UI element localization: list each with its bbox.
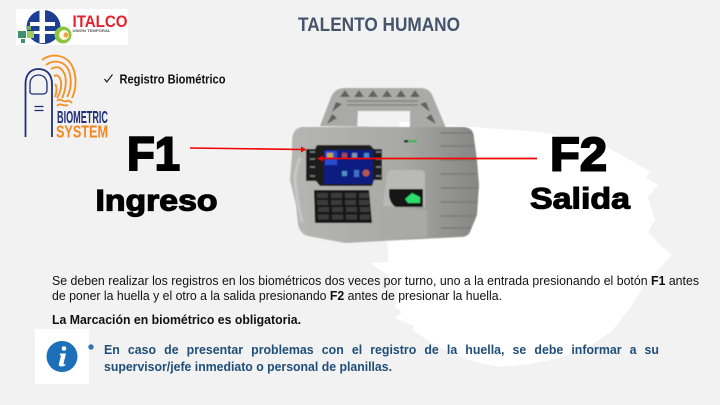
biometric device illustration: [290, 88, 479, 243]
icon: biometric system: BIOMETRIC: [57, 107, 108, 127]
status LED: [404, 140, 408, 142]
arrow: F1 to device button: [190, 146, 306, 152]
title: TALENTO HUMANO: [298, 14, 460, 36]
keypad: [314, 190, 372, 223]
screen: [324, 150, 373, 184]
screen icons: [325, 151, 370, 177]
icon: biometric system: SYSTEM: [56, 122, 108, 142]
checklist item: Registro Biométrico: Registro Biométrico: [120, 72, 226, 86]
body text: registration instructions: Se deben realizar los registros en los biométricos dos veces por turno, uno a la entrada presionando el botón F1 antes: [52, 273, 702, 288]
lower panel: [382, 210, 427, 237]
equals mark: [34, 106, 44, 110]
logo: ITALCO: ITALCO: [72, 13, 128, 31]
callout: fingerprint problems: supervisor/jefe inmediato o personal de planillas.: [104, 359, 392, 374]
keypad keys: [317, 193, 370, 220]
side buttons: [310, 152, 381, 176]
fingerprint arcs: [42, 56, 76, 106]
label: F1: F1: [127, 127, 180, 180]
icon: biometric system: [26, 56, 108, 141]
handle band: [347, 101, 418, 105]
device body: [290, 127, 479, 243]
logo: ITALCO: [16, 9, 128, 45]
label: Salida: Salida: [530, 182, 630, 216]
arrow: F2 to device button: [317, 156, 537, 162]
finger outline: [26, 69, 52, 137]
label: F2: F2: [550, 128, 607, 180]
white brush stroke background: [370, 122, 672, 367]
callout: fingerprint problems: [88, 342, 663, 374]
handle lattice: [327, 90, 436, 124]
callout: fingerprint problems: En caso de presentar problemas con el registro de la huella, se debe informar a su: [104, 342, 659, 357]
nail outline: [30, 75, 47, 94]
logo: ITALCO: UNIÓN TEMPORAL: [72, 28, 111, 33]
side grip: [295, 158, 302, 222]
label: Ingreso: Ingreso: [96, 184, 218, 218]
device handle: [320, 88, 446, 128]
bold notice: La Marcación en biométrico es obligatoria.: [52, 312, 301, 327]
body ribs: [441, 133, 478, 228]
body text: registration instructions: de poner la huella y el otro a la salida presionando F2 antes de presionar la huella.: [52, 288, 515, 303]
sensor green light: [405, 193, 420, 203]
screen bezel: [306, 145, 382, 186]
fingerprint sensor: [389, 189, 423, 207]
icon: information: [35, 329, 89, 384]
fingerprint reader housing: [383, 170, 425, 207]
